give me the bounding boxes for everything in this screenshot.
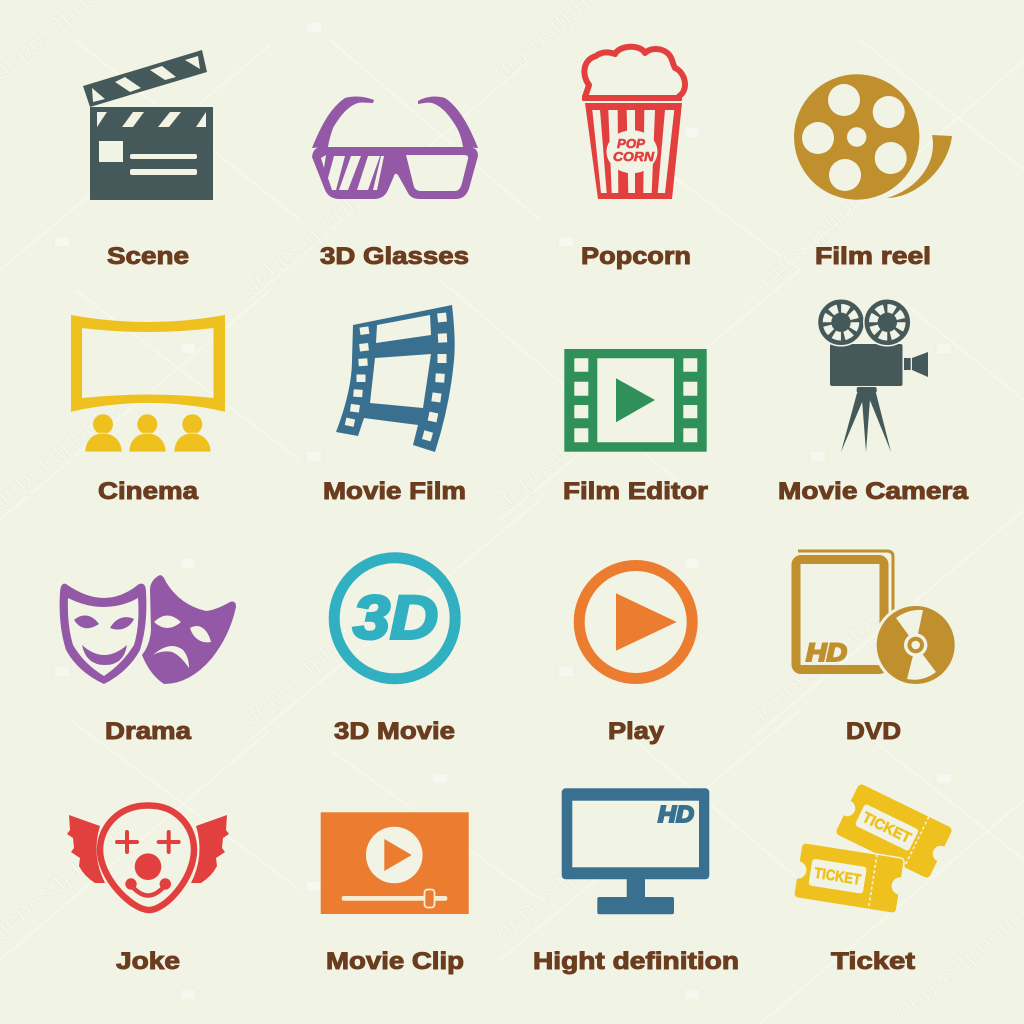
label: Film reel: Film reel [815,243,931,270]
icon: tickets: TICKET [859,809,914,847]
icon: tickets: TICKET [813,865,862,889]
icon: movie clip player [321,812,469,914]
icon: 3D glasses [312,97,478,199]
icon: clapperboard [83,50,213,200]
icon: play button [579,566,692,678]
icon: popcorn: POP [617,136,645,151]
label: DVD: DVD [846,718,901,745]
label: Ticket: Ticket [831,948,915,975]
text: depositphotos [740,602,888,733]
icon: HD monitor: HD [658,801,694,827]
label: Drama: Drama [105,718,192,745]
icon: cinema screen [71,315,225,452]
label: Scene: Scene [107,243,189,270]
icon: movie camera [818,299,928,452]
text: depositphotos [488,386,636,517]
icon: popcorn: CORN [613,149,655,164]
icon: tickets [793,783,953,914]
label: Movie Film: Movie Film [323,478,466,505]
text: depositphotos [235,172,383,303]
icon: drama masks [60,575,236,684]
label: Movie Clip: Movie Clip [326,948,464,975]
label: Joke: Joke [116,948,180,975]
label: Cinema: Cinema [98,478,199,505]
label: Play: Play [608,718,665,745]
label: Film Editor: Film Editor [563,478,708,505]
icon: 3D circle [334,558,455,679]
icon: clown face [67,805,229,910]
label: 3D Glasses: 3D Glasses [320,243,469,270]
icon: film editor [564,349,707,452]
icon: 3D circle: 3D [353,584,438,652]
label: Movie Camera: Movie Camera [778,478,969,505]
icon: popcorn [582,47,685,199]
icon: DVD case and disc: HD [806,639,847,667]
text: depositphotos [235,602,383,733]
icon: film reel [794,74,952,200]
label: Popcorn: Popcorn [581,243,691,270]
icon: HD monitor [562,788,709,914]
icon: movie film strip [336,305,455,452]
label: Hight definition: Hight definition [533,948,739,975]
text: depositphotos [488,816,636,947]
label: 3D Movie: 3D Movie [334,718,455,745]
text: depositphotos [740,172,888,303]
icon: DVD case and disc [796,551,958,687]
